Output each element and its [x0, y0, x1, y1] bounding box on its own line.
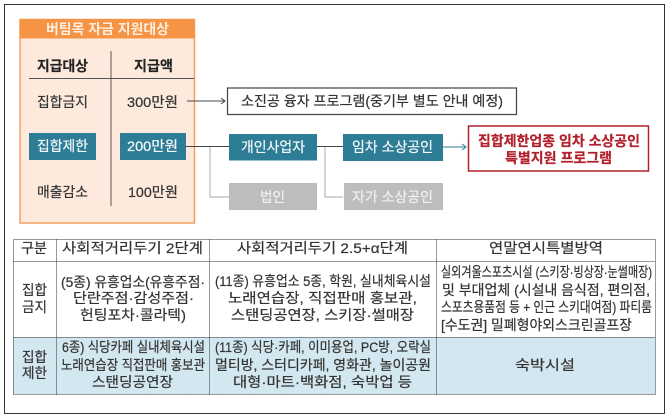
row: sales decline: 100만원	[128, 184, 178, 200]
table grid	[14, 240, 656, 394]
row: gathering restricted: 200만원	[127, 138, 178, 154]
column heading: amount: 지급액	[134, 58, 173, 74]
table row: gathering ban: 집합	[22, 282, 47, 298]
table row: gathering restricted: 멀티방, 스터디카페, 영화관, 놀이공원	[215, 357, 431, 373]
row: gathering restricted: 집합제한	[37, 138, 88, 154]
table header row: 연말연시특별방역	[489, 240, 603, 256]
row: gathering ban: 300만원	[127, 94, 178, 110]
table row: gathering restricted: 노래연습장 직접판매 홍보관	[61, 357, 205, 373]
connector: gray branches	[210, 147, 343, 197]
table row: gathering restricted: 숙박시설	[515, 357, 575, 373]
box: tenant small business	[343, 134, 443, 161]
box: special support program	[468, 126, 648, 171]
box: sole proprietor: 개인사업자	[241, 139, 305, 155]
table header row	[21, 240, 603, 256]
connector: 200만원 to tenants	[186, 146, 343, 148]
column heading: target: 지급대상	[37, 58, 88, 74]
box: special support program: 특별지원 프로그램	[505, 150, 612, 166]
arrow: 300만원 to loan program	[187, 98, 225, 104]
table: business categories	[13, 240, 656, 394]
table row: gathering restricted: 스탠딩공연장	[92, 374, 173, 390]
panel background	[20, 20, 194, 223]
table row: gathering restricted	[22, 339, 575, 390]
table row: gathering ban: (5종) 유흥업소(유흥주점·	[61, 274, 205, 290]
panel heading	[20, 19, 194, 38]
table row: gathering ban: 금지	[22, 299, 47, 315]
box: corporation: 법인	[260, 189, 285, 205]
box: owner small business: 자가 소상공인	[352, 189, 433, 205]
column divider	[29, 51, 194, 206]
table row: gathering ban: (11종) 유흥업소 5종, 학원, 실내체육시설	[215, 273, 431, 289]
box: corporation	[229, 183, 317, 210]
box: loan program: 소진공 융자 프로그램(중기부 별도 안내 예정)	[241, 93, 503, 109]
table row: gathering restricted: 6종) 식당카페 실내체육시설	[62, 339, 205, 355]
table header row: 사회적거리두기 2단계	[62, 240, 203, 256]
row: sales decline	[37, 184, 178, 200]
table row: gathering ban	[22, 264, 652, 333]
table row: gathering ban: 노래연습장, 직접판매 홍보관,	[228, 290, 417, 306]
box: loan program	[228, 88, 516, 114]
box: tenant small business: 임차 소상공인	[352, 139, 433, 155]
table row: gathering ban: 및 부대업체 (시설내 음식점, 편의점,	[442, 282, 650, 298]
table header row: 사회적거리두기 2.5+α단계	[237, 240, 408, 256]
table row: gathering restricted: (11종) 식당·카페, 이미용업, PC방, 오락실	[215, 339, 431, 355]
table header row: 구분	[21, 240, 47, 256]
row: sales decline: 매출감소	[37, 184, 88, 200]
table row: gathering restricted: 집합	[22, 349, 47, 365]
panel heading: 버팀목 자금 지원대상	[46, 21, 169, 37]
panel: support targets	[20, 19, 194, 223]
box: sole proprietor	[229, 134, 317, 160]
table row: gathering restricted: 대형·마트·백화점, 숙박업 등	[233, 374, 412, 390]
table row: gathering ban: 스탠딩공연장, 스키장·썰매장	[231, 307, 414, 323]
table row: gathering ban: [수도권] 밀폐형야외스크린골프장	[441, 317, 632, 333]
table row: gathering ban: 헌팅포차·콜라텍)	[80, 307, 186, 323]
row: gathering ban	[37, 94, 178, 110]
box: owner small business	[344, 183, 443, 210]
row: gathering ban: 집합금지	[37, 94, 88, 110]
arrow: tenants to special program	[443, 144, 466, 150]
table row: gathering ban: 단란주점·감성주점·	[73, 290, 194, 306]
box: special support program: 집합제한업종 임차 소상공인	[478, 133, 640, 149]
table row: gathering restricted: 제한	[22, 365, 47, 381]
table row shading	[13, 337, 655, 394]
row: gathering restricted	[29, 133, 186, 160]
